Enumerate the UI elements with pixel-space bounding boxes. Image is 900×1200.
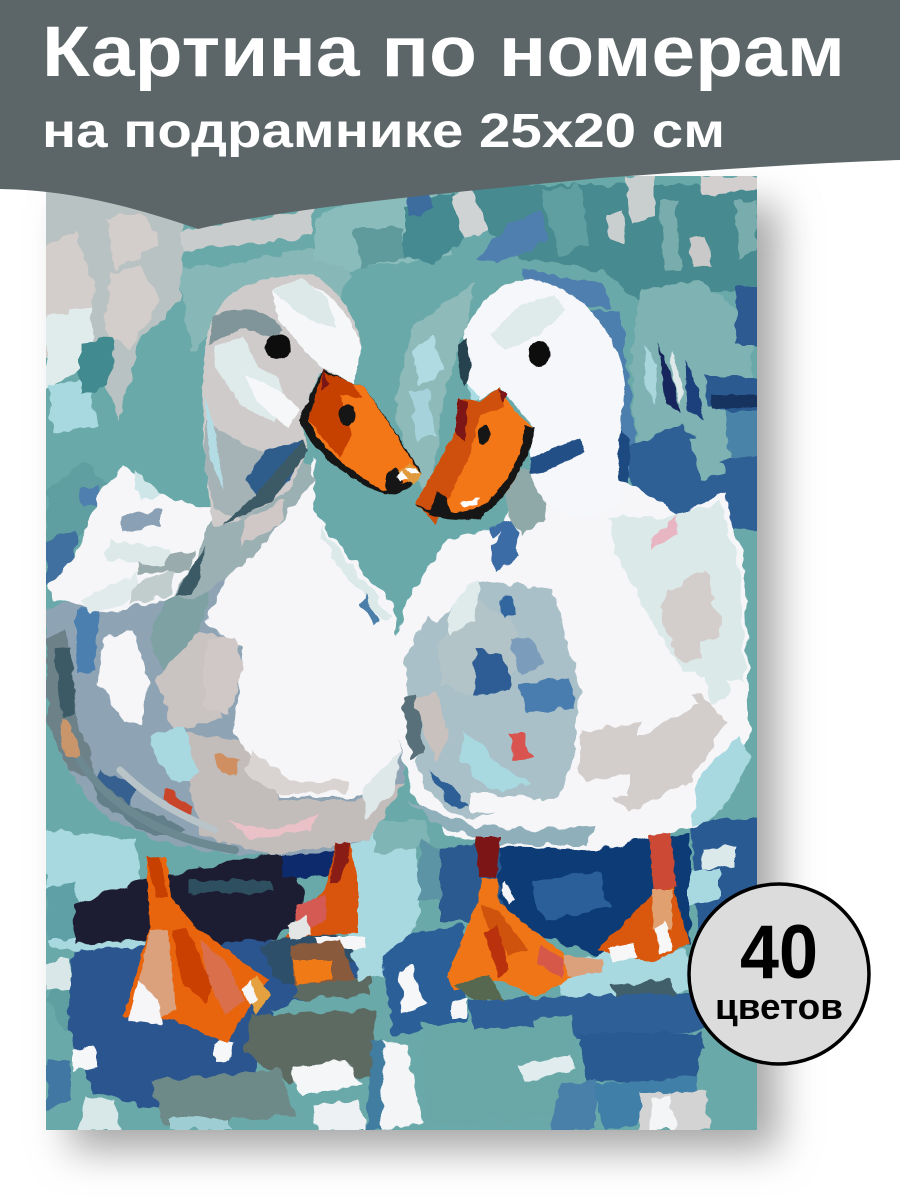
canvas shadow xyxy=(70,205,778,1150)
right duck beak xyxy=(415,387,535,525)
duck feet xyxy=(123,833,690,1043)
subtitle: на подрамнике 25х20 см xyxy=(42,105,725,158)
left duck white belly xyxy=(206,457,404,797)
front left foot xyxy=(123,857,268,1043)
left duck wing xyxy=(49,463,216,613)
badge: 40 colours xyxy=(689,884,869,1064)
left duck xyxy=(46,450,405,855)
title: Картина по номерам xyxy=(42,13,845,92)
painting background xyxy=(30,170,770,585)
right duck head and neck xyxy=(458,280,625,517)
left duck beak xyxy=(299,370,422,494)
eyes xyxy=(265,335,550,367)
right duck xyxy=(397,460,752,850)
front right foot xyxy=(447,878,572,997)
badge: 40 colours: цветов xyxy=(715,986,843,1027)
right duck body xyxy=(397,460,750,850)
painting: two white ducks xyxy=(30,170,770,1150)
header banner xyxy=(0,0,900,229)
left duck outer body xyxy=(46,517,404,855)
dark brush strokes xyxy=(608,343,757,490)
body swirl strokes xyxy=(76,756,239,854)
left duck grey neck band xyxy=(173,450,315,600)
badge: 40 colours: 40 xyxy=(740,910,818,995)
right foot xyxy=(597,863,690,962)
left duck head and neck xyxy=(203,274,362,527)
back left foot xyxy=(286,843,358,938)
water xyxy=(46,818,757,1130)
